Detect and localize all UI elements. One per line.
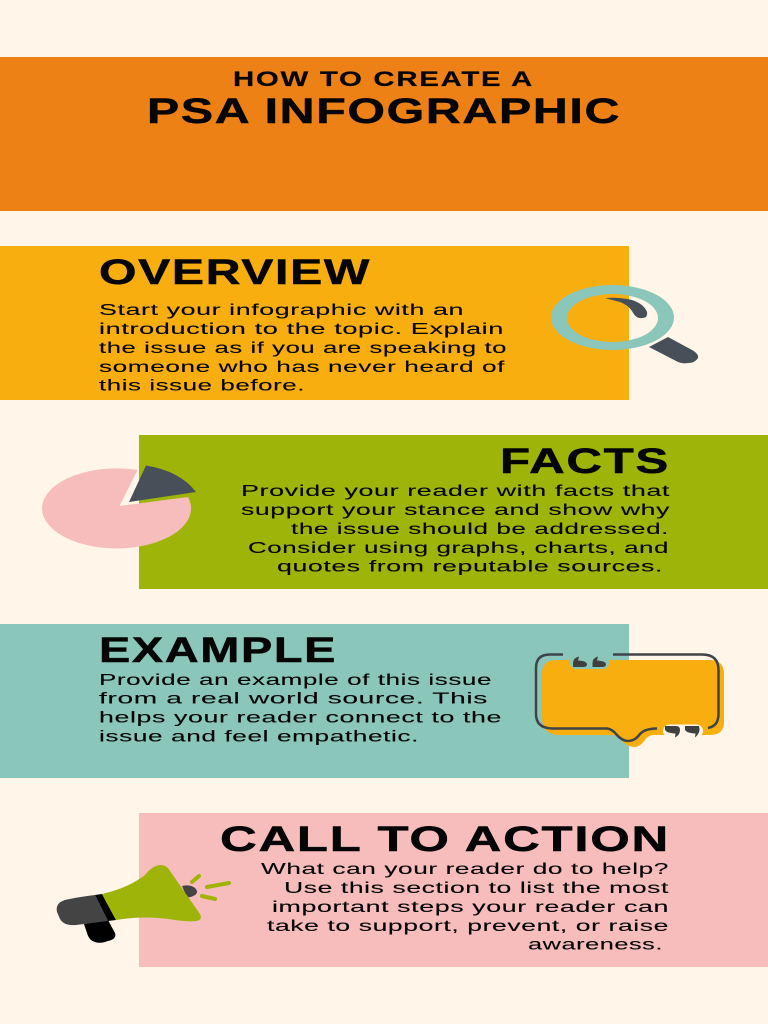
text block: call to action — [261, 861, 669, 954]
panel: example — [0, 624, 724, 778]
panel: call to action — [57, 813, 768, 967]
heading: overview: OVERVIEW — [99, 253, 371, 292]
text block: call to action: take to support, prevent, or raise — [267, 918, 669, 935]
text block: facts: the issue should be addressed. — [291, 521, 669, 538]
text block: example — [99, 672, 502, 746]
text block: example: Provide an example of this issue — [99, 672, 492, 689]
panel: overview — [0, 246, 698, 400]
text block: call to action: awareness. — [528, 936, 663, 954]
chart: pie icon — [42, 466, 196, 548]
panel: title banner — [0, 57, 768, 211]
text block: overview: introduction to the topic. Explain — [99, 321, 504, 338]
text block: facts: Consider using graphs, charts, and — [248, 540, 669, 557]
heading: example: EXAMPLE — [99, 631, 337, 670]
text block: facts: quotes from reputable sources. — [277, 558, 663, 576]
text block: overview: the issue as if you are speaking to — [99, 340, 507, 357]
text block: overview: someone who has never heard of — [99, 359, 505, 376]
icon: megaphone — [57, 865, 229, 943]
heading: call to action: CALL TO ACTION — [220, 820, 670, 859]
text block: call to action: important steps your reader can — [272, 899, 669, 916]
icon: magnifying glass — [551, 285, 698, 363]
text block: example: from a real world source. This — [99, 690, 488, 708]
title kicker: HOW TO CREATE A — [233, 68, 534, 91]
heading: facts: FACTS — [500, 442, 670, 481]
text block: facts: support your stance and show why — [241, 502, 670, 519]
text block: facts: Provide your reader with facts that — [241, 483, 670, 500]
title: PSA INFOGRAPHIC — [147, 92, 621, 131]
text block: call to action: Use this section to list the most — [284, 880, 669, 897]
text block: overview: Start your infographic with an — [99, 302, 464, 319]
text block: call to action: What can your reader do to help? — [261, 861, 669, 878]
text block: facts — [241, 483, 670, 576]
text block: overview — [99, 302, 507, 394]
text block: overview: this issue before. — [99, 378, 305, 394]
panel: facts — [42, 435, 768, 589]
text block: example: helps your reader connect to the — [99, 710, 502, 726]
icon: speech bubble — [536, 654, 724, 747]
text block: example: issue and feel empathetic. — [99, 728, 419, 746]
